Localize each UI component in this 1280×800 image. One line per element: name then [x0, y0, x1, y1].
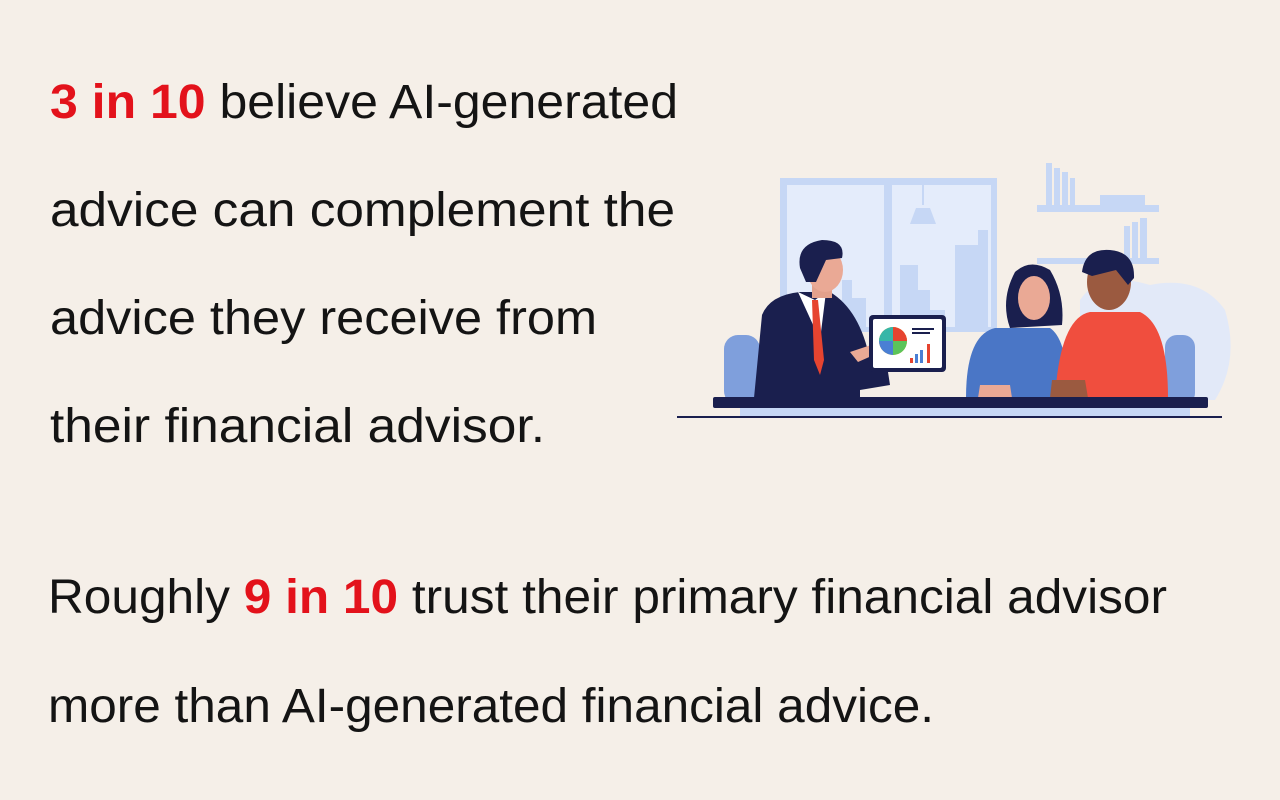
advisor	[754, 240, 890, 398]
text block: 3 in 10 statement	[50, 76, 678, 453]
text block: 3 in 10 statement: 3 in 10 believe AI-generated	[50, 76, 678, 129]
text block: 9 in 10 statement	[48, 571, 1167, 733]
text block: 9 in 10 statement: Roughly 9 in 10 trust their primary financial advisor	[48, 571, 1167, 624]
sofas	[724, 335, 760, 405]
illustration: advisor meeting	[677, 163, 1231, 418]
table	[677, 397, 1222, 418]
tablet with charts	[869, 315, 946, 372]
window	[780, 178, 997, 332]
text block: 3 in 10 statement: their financial advisor.	[50, 400, 545, 453]
text block: 3 in 10 statement: advice they receive from	[50, 292, 597, 345]
man in red	[1050, 250, 1168, 398]
woman	[966, 264, 1068, 398]
text block: 9 in 10 statement: more than AI-generated financial advice.	[48, 680, 934, 733]
background blob	[1080, 280, 1231, 400]
shelves	[1037, 163, 1159, 264]
text block: 3 in 10 statement: advice can complement the	[50, 184, 675, 237]
